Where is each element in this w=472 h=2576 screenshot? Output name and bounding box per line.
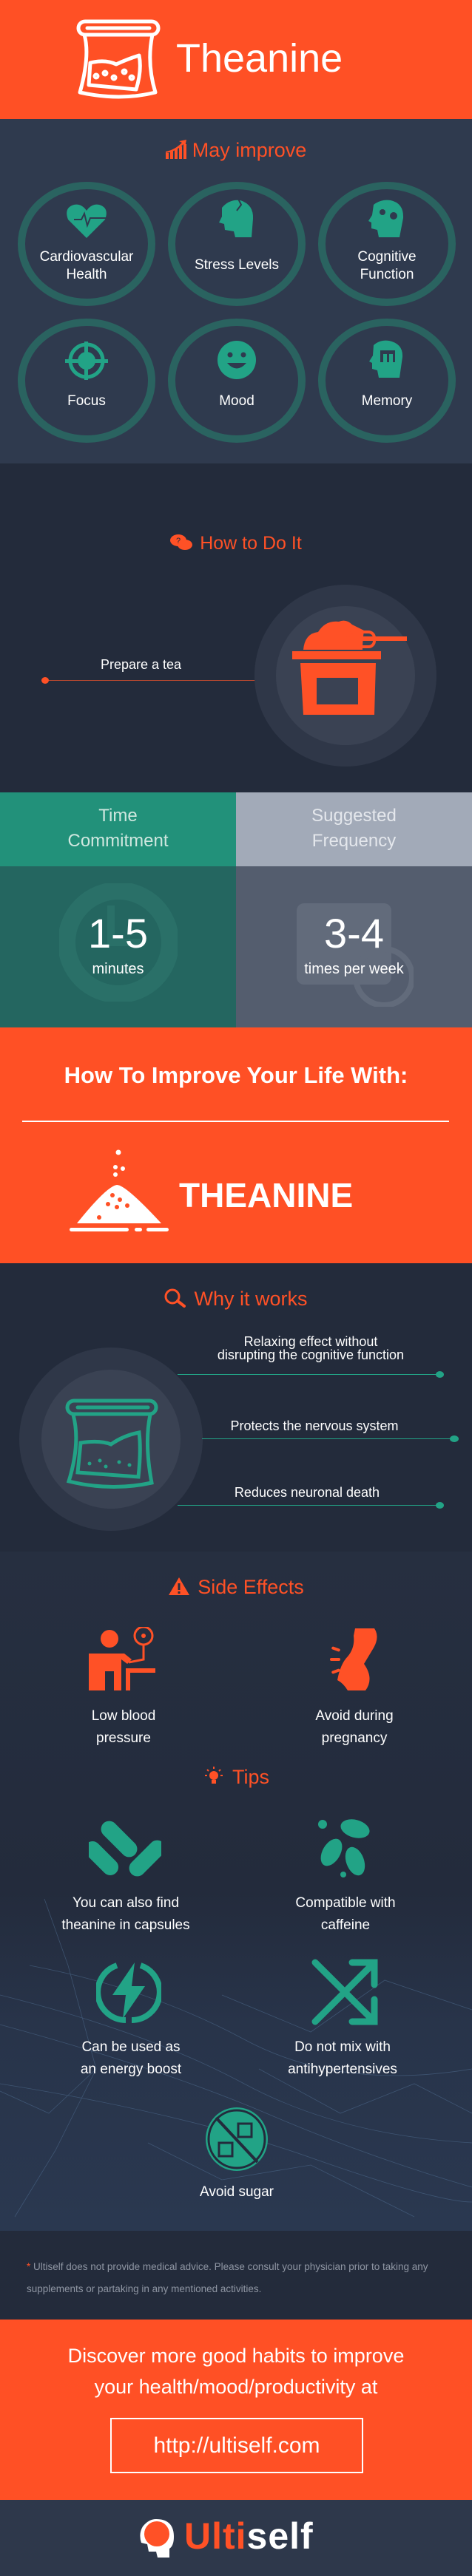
icon: calendar bg [297,903,414,1007]
icon: pregnancy [330,1628,377,1690]
icon: powder pile [70,1150,169,1231]
cta text: your health/mood/productivity at [95,2376,377,2398]
icon: stress head [219,199,253,237]
heading: may improve: May improve [192,139,306,161]
heading: tips: Tips [232,1766,269,1788]
label: cognitive [357,249,417,282]
text: caffeine: caffeine [321,1917,370,1933]
label: memory: Memory [362,393,412,409]
panel: side effects and tips [0,1552,472,2231]
icon: smiley [218,341,256,379]
title: theanine: THEANINE [179,1176,353,1214]
panel: suggested frequency: Suggested [311,806,397,826]
icon: clock bg [59,883,178,1002]
panel: suggested frequency [236,792,472,1027]
label: cognitive: Function [360,267,414,282]
text: avoid during pregnancy [315,1708,394,1746]
icon: low blood pressure [89,1627,155,1690]
icon: theanine bag [77,19,160,99]
text: capsules: You can also find [73,1895,179,1911]
disclaimer: * Ultiself does not provide medical advice. Please consult your physician prior to taking any supplements or partaking in any mentioned activities. [27,2261,428,2294]
url button [110,2418,363,2473]
label: cognitive: Cognitive [357,249,417,265]
panel: suggested frequency: Frequency [312,831,396,851]
heading: how to do it: ? [176,537,181,546]
text: caffeine [295,1895,396,1933]
step: prepare a tea [41,657,254,684]
value: 1-5 [88,910,148,956]
panel: may improve [0,119,472,463]
label: stress: Stress Levels [195,257,279,273]
icon: shuffle arrows [312,1959,377,2025]
text: energy: Can be used as [81,2039,181,2055]
panel: why it works [0,1263,472,1552]
text: energy: an energy boost [81,2062,181,2077]
benefit circles [18,182,456,443]
reason 3: Reduces neuronal death [235,1485,380,1500]
text: antihypertensives: antihypertensives [288,2062,397,2077]
text: avoid during pregnancy: pregnancy [322,1730,387,1746]
icon: energy [96,1962,161,2023]
reason 3 [178,1485,444,1509]
header [0,0,472,119]
text: energy [81,2039,182,2077]
reason 1 [178,1334,444,1378]
label: mood: Mood [219,393,254,409]
title: Theanine [176,36,343,81]
text: antihypertensives [288,2039,397,2077]
icon: target [65,341,108,380]
label: cardiovascular [40,249,133,282]
label: focus: Focus [67,393,106,409]
panel: suggested frequency: times per week [304,961,404,977]
text: caffeine: Compatible with [295,1895,396,1911]
icon: bag in circle [19,1348,203,1531]
header: Commitment [67,831,169,851]
text: low blood pressure [92,1708,155,1746]
text: capsules [61,1895,190,1933]
cta text [68,2345,404,2398]
step: prepare a tea: Prepare a tea [101,657,181,672]
panel: suggested frequency: 3-4 [324,910,384,956]
header [0,792,236,866]
heading: tips [205,1766,269,1788]
logo: Ultiself [184,2515,314,2557]
heading: side effects: Side Effects [198,1576,304,1598]
reason 1: disrupting the cognitive function [218,1348,404,1362]
cta text: Discover more good habits to improve [68,2345,404,2367]
icon: cognitive head [368,200,403,237]
heading: How To Improve Your Life With: [64,1062,408,1088]
icon: capsules [89,1821,161,1876]
header: Time [98,806,138,826]
url button: http://ultiself.com [153,2433,320,2458]
icon: heart [67,205,107,238]
label: cardiovascular: Health [67,267,107,282]
panel: how to improve [0,1027,472,1263]
icon: no sugar [206,2107,268,2171]
heading: how to do it: How to Do It [200,533,302,554]
reason 2 [202,1418,459,1442]
text: avoid sugar: Avoid sugar [200,2184,274,2200]
panel: how to do it [0,463,472,792]
reason 2: Protects the nervous system [230,1418,399,1433]
network background [0,1899,472,2218]
text: antihypertensives: Do not mix with [294,2039,391,2055]
icon: memory head [369,341,402,378]
text: low blood pressure: pressure [96,1730,151,1746]
panel: time commitment [0,792,236,1027]
label: cardiovascular: Cardiovascular [40,249,133,265]
icon: coffee beans [318,1819,370,1877]
panel: call to action [0,2320,472,2500]
text: low blood pressure: Low blood [92,1708,155,1724]
text: capsules: theanine in capsules [61,1917,190,1933]
reason 1: Relaxing effect without [244,1334,377,1349]
footer [0,2500,472,2576]
panel: time commitment: minutes [92,961,144,977]
heading: Why it works [194,1288,308,1310]
icon: tea canister [254,585,436,767]
text: avoid during pregnancy: Avoid during [315,1708,394,1724]
